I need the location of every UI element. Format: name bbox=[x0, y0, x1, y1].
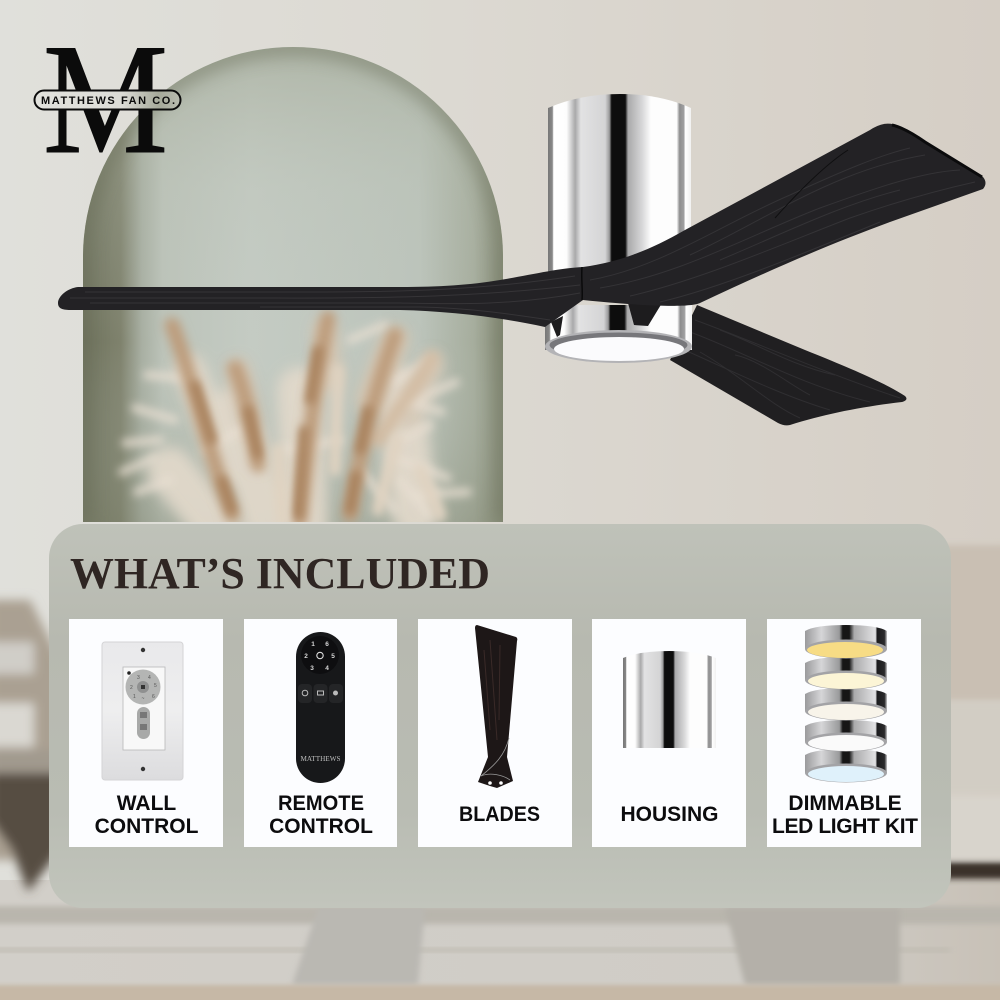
right blade bbox=[583, 124, 986, 306]
logo name: MATTHEWS FAN CO. bbox=[41, 95, 175, 107]
sofa, right bbox=[930, 545, 1000, 879]
label: remote control: REMOTE bbox=[278, 792, 364, 815]
ceiling fan bbox=[58, 94, 986, 425]
icon: remote control: 6 bbox=[325, 641, 329, 648]
left blade bbox=[58, 267, 583, 327]
card: remote control bbox=[244, 619, 397, 847]
light bezel bbox=[545, 330, 692, 363]
heading: WHAT’S INCLUDED bbox=[70, 549, 490, 598]
label: dimmable LED light kit: DIMMABLE bbox=[788, 792, 902, 815]
pampas grass plumes bbox=[122, 318, 468, 525]
arch niche with pampas grass bbox=[83, 47, 503, 525]
label: dimmable LED light kit: LED LIGHT KIT bbox=[772, 815, 918, 838]
icon: remote control: 1 bbox=[311, 641, 315, 648]
floor bbox=[0, 880, 1000, 1000]
label: housing: HOUSING bbox=[620, 803, 719, 826]
icon: wall control bbox=[102, 642, 183, 780]
label: wall control: WALL bbox=[117, 792, 176, 815]
icon: remote control: 3 bbox=[310, 665, 314, 672]
icon: LED light kit, five colour temperatures bbox=[805, 625, 887, 782]
sofa and cushions, left bbox=[0, 600, 60, 892]
logo name pill bbox=[34, 90, 180, 110]
icon: wall control: 4 bbox=[148, 675, 151, 681]
blade joint seam bbox=[581, 267, 583, 300]
light kit chrome body bbox=[545, 305, 692, 350]
label: remote control: CONTROL bbox=[269, 815, 373, 838]
card: wall control bbox=[69, 619, 223, 847]
icon: wall control: 2 bbox=[130, 685, 133, 691]
fan housing bbox=[548, 94, 691, 300]
logo: Matthews Fan Co. bbox=[34, 12, 180, 187]
panel: what's included bbox=[49, 524, 951, 908]
icon: remote control: 4 bbox=[325, 665, 329, 672]
card: blades bbox=[418, 619, 572, 847]
lower blade bbox=[670, 305, 906, 425]
icon: wall control: 1 bbox=[133, 694, 136, 700]
label: blades: BLADES bbox=[459, 803, 540, 826]
icon: wall control: 3 bbox=[137, 675, 140, 681]
icon: remote control: MATTHEWS bbox=[300, 754, 340, 763]
label: wall control: CONTROL bbox=[95, 815, 199, 838]
icon: remote control bbox=[296, 632, 345, 783]
logo letter M: M bbox=[43, 12, 168, 187]
icon: wall control: 5 bbox=[154, 683, 157, 689]
card: housing bbox=[592, 619, 746, 847]
icon: remote control: 5 bbox=[331, 653, 335, 660]
icon: housing bbox=[623, 651, 716, 748]
mounting arms bbox=[551, 303, 662, 337]
panel background bbox=[49, 524, 951, 908]
icon: remote control: 2 bbox=[304, 653, 308, 660]
icon: wall control: ~ bbox=[142, 696, 145, 702]
LED light disc bbox=[554, 337, 684, 361]
icon: blade bbox=[475, 625, 517, 788]
card: dimmable LED light kit bbox=[767, 619, 921, 847]
icon: wall control: 6 bbox=[152, 694, 155, 700]
